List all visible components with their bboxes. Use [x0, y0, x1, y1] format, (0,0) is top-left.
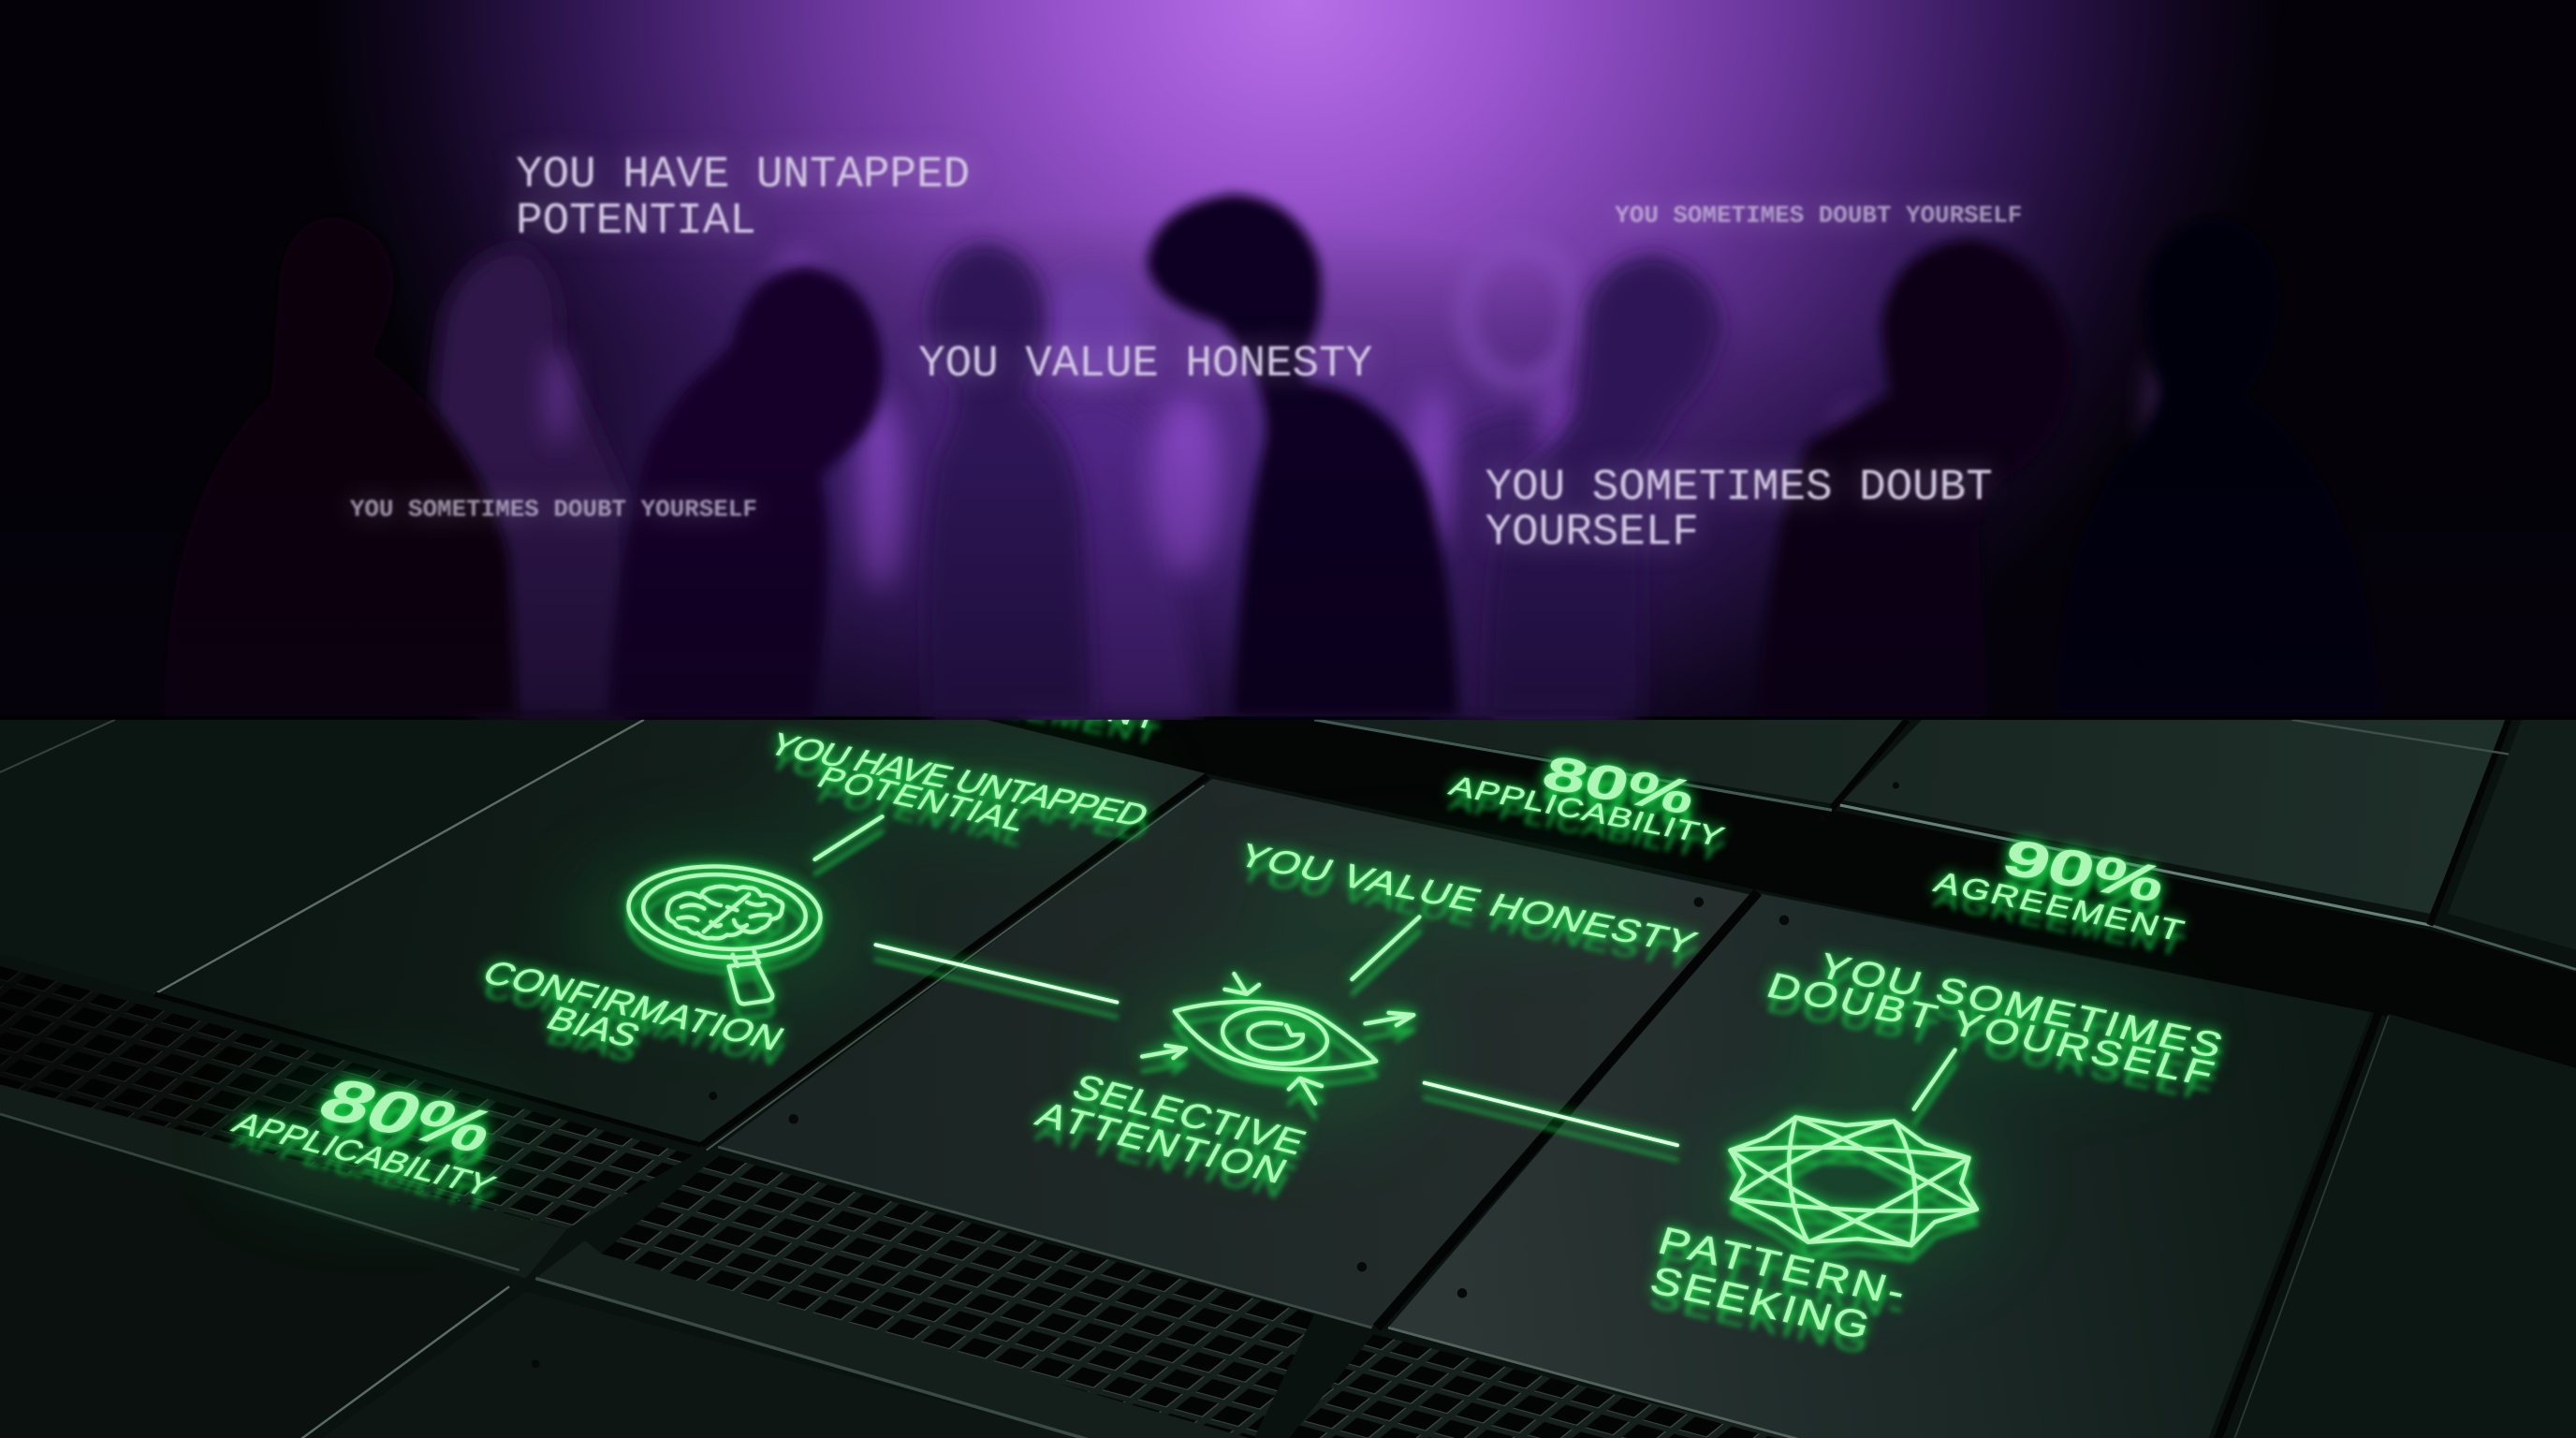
- connector: attention to pattern: [1425, 1083, 1677, 1145]
- drain grate: centre section: [535, 1155, 1314, 1438]
- plate: lower left: [0, 1134, 501, 1438]
- floating text: you have untapped potential: YOU HAVE UNTAPPED: [516, 150, 970, 200]
- icon: brain in magnifying glass: [625, 860, 824, 1004]
- plate: selective attention: [718, 779, 1754, 1328]
- seams and rails: [0, 720, 2576, 1438]
- rim lights: [550, 255, 2165, 592]
- lower vignette: [0, 444, 2576, 716]
- floating text: you have untapped potential: [516, 150, 970, 246]
- connector: statement to magnifier: [815, 816, 882, 859]
- back crowd silhouettes: [432, 243, 1618, 716]
- drain grate: left section: [0, 966, 694, 1278]
- floating text: you have untapped potential: POTENTIAL: [516, 196, 756, 246]
- stat: 80% applicability lower: 80%: [306, 1066, 509, 1166]
- label: selective attention: ATTENTION: [1030, 1095, 1294, 1190]
- plate: upper right: [1843, 720, 2509, 914]
- floating text: you sometimes doubt yourself upper small: YOU SOMETIMES DOUBT YOURSELF: [1615, 201, 2022, 229]
- drain grate: right section: [1288, 1334, 1799, 1438]
- panel: green floor scene: [0, 661, 2576, 1438]
- stat: 90% agreement: 90%: [1996, 829, 2173, 913]
- label: pattern-seeking: SEEKING: [1646, 1258, 1875, 1347]
- plate: upper centre: [1314, 720, 1908, 803]
- lower haze: [0, 198, 2576, 716]
- connector: statement to eye: [1352, 917, 1419, 979]
- plate: upper left: [0, 720, 644, 994]
- connector: confirmation to attention: [875, 945, 1117, 1003]
- label: you sometimes doubt yourself: YOU SOMETIMES: [1812, 946, 2228, 1065]
- floor base: [0, 720, 2576, 1438]
- floating text: you value honesty: YOU VALUE HONESTY: [918, 339, 1372, 389]
- plate: pattern seeking: [1388, 894, 2371, 1438]
- icon: geometric rosette: [1730, 1117, 1977, 1245]
- floating text: you sometimes doubt yourself large: [1486, 462, 1993, 558]
- icon: eye with arrows: [1142, 974, 1413, 1104]
- label: you have untapped potential: YOU HAVE UNTAPPED: [761, 727, 1155, 833]
- stat: 80% applicability lower: [226, 1066, 509, 1202]
- plate: confirmation bias: [414, 720, 1208, 1142]
- plate: lower centre: [320, 1292, 1088, 1438]
- label: you sometimes doubt yourself: DOUBT YOURSELF: [1762, 966, 2218, 1093]
- panel: purple crowd scene: [0, 0, 2576, 716]
- plate bolts: [532, 782, 1899, 1368]
- label: you have untapped potential: POTENTIAL: [811, 760, 1034, 837]
- label: pattern-seeking: PATTERN-: [1653, 1219, 1910, 1313]
- plate: far upper right: [2448, 720, 2576, 949]
- channel behind plates: [986, 720, 2576, 1068]
- front crowd silhouettes: [165, 194, 2382, 716]
- stat: 90% agreement: AGREEMENT: [1929, 866, 2188, 947]
- green ambient glow: [238, 753, 2185, 1282]
- floating text: you sometimes doubt yourself lower small: YOU SOMETIMES DOUBT YOURSELF: [350, 495, 757, 523]
- label: confirmation bias: CONFIRMATION: [476, 954, 791, 1057]
- connector: statement to rosette: [1914, 1050, 1955, 1109]
- label: confirmation bias: BIAS: [539, 1001, 647, 1054]
- label: you value honesty: YOU VALUE HONESTY: [1232, 837, 1704, 961]
- floating text: you sometimes doubt yourself large: YOU SOMETIMES DOUBT: [1486, 462, 1993, 513]
- stat: 90% agreement: [1929, 829, 2188, 947]
- label: selective attention: SELECTIVE: [1066, 1066, 1312, 1162]
- stat: 80% applicability upper: APPLICABILITY: [1445, 771, 1728, 852]
- stat: 80% applicability lower: APPLICABILITY: [226, 1107, 502, 1202]
- partial clipped stat label: AGREEMENT: [915, 661, 1163, 736]
- stat: 80% applicability upper: 80%: [1536, 745, 1703, 824]
- purple light haze: [0, 0, 2576, 716]
- mid crowd silhouettes: [926, 243, 1721, 716]
- floating text: you sometimes doubt yourself large: YOURSELF: [1486, 507, 1699, 558]
- plate: far right: [2389, 1014, 2566, 1065]
